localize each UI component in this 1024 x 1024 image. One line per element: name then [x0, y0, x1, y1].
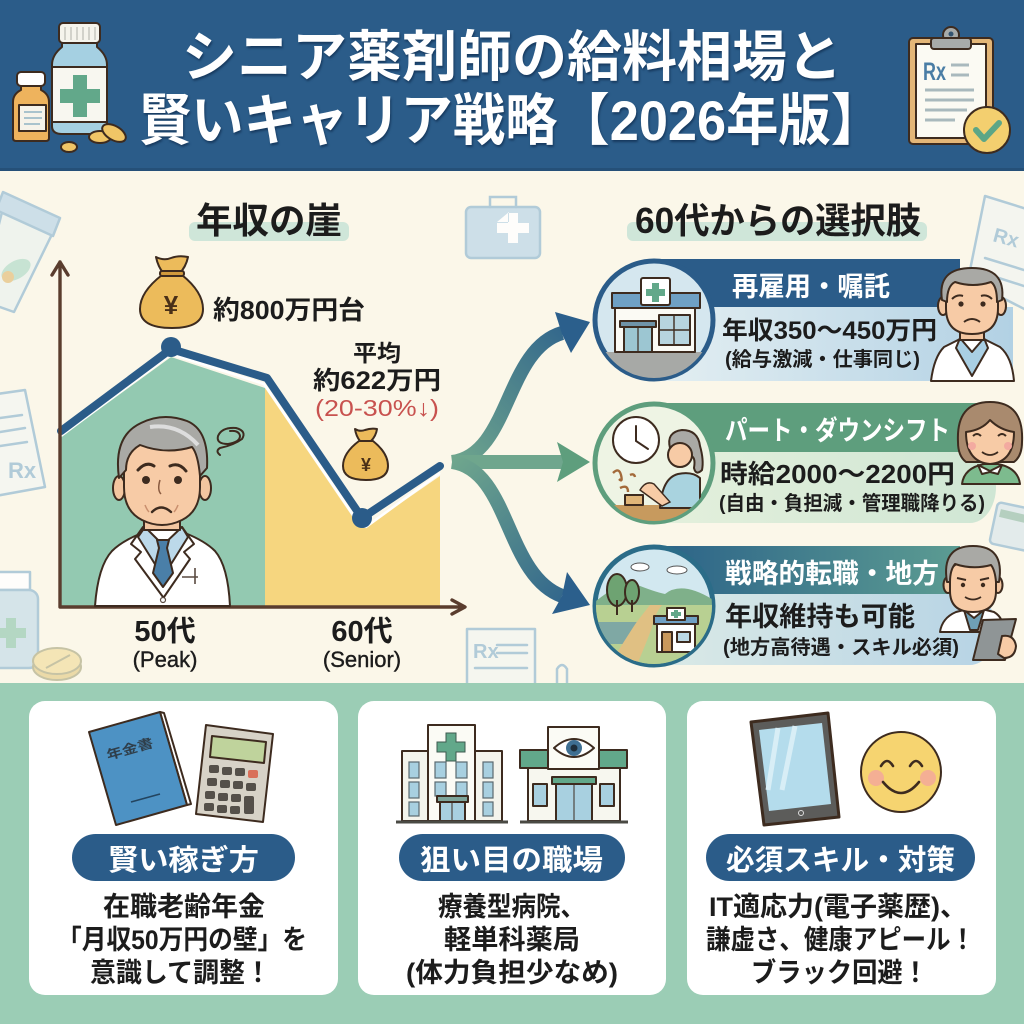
icon: calculator: [196, 725, 273, 822]
body text: 意識して調整！: [90, 958, 271, 988]
bottom mint band: [0, 683, 1024, 1024]
scene: rural pharmacy: [590, 547, 725, 668]
body text: [57, 892, 307, 988]
body text: IT適応力(電子薬歴)、: [709, 892, 967, 922]
pill heading: 狙い目の職場: [420, 844, 603, 877]
text: 再雇用・嘱託: [732, 272, 890, 302]
yellow area 60s: [265, 388, 440, 606]
body text: 在職老齢年金: [103, 892, 265, 922]
body text: (体力負担少なめ): [406, 958, 618, 988]
icon: eye clinic: [520, 727, 628, 822]
watermark medical icons: Rx: [8, 458, 37, 483]
body text: [706, 892, 975, 988]
title: 賢いキャリア戦略【2026年版】: [139, 89, 883, 152]
icon: smiley: [861, 732, 941, 812]
header band: [0, 0, 1024, 171]
icon: prescription clipboard with check: Rx: [923, 58, 946, 86]
scene: pharmacy building: [590, 261, 720, 382]
panel: 必須スキル・対策: [687, 701, 996, 995]
panel: 賢い稼ぎ方: [29, 701, 338, 995]
pill heading: 賢い稼ぎ方: [108, 844, 259, 877]
panel: 再雇用・嘱託: [590, 259, 1014, 382]
title: [139, 26, 883, 152]
label: 平均 約622万円: 平均: [353, 340, 401, 366]
icon: dizzy squiggle: [218, 428, 244, 455]
body text: [406, 892, 618, 988]
arrow: to part-time: [452, 442, 590, 482]
icon: tablet: [751, 713, 839, 825]
watermark medical icons: Rx: [473, 641, 499, 663]
panel: 戦略的転職・地方: 年収維持も可能: [725, 602, 915, 632]
body text: 軽単科薬局: [444, 925, 580, 955]
label: 約800万円台: 約800万円台: [213, 295, 365, 325]
icon: prescription clipboard with check: [909, 27, 1010, 153]
body text: 「月収50万円の壁」を: [57, 925, 307, 955]
icon: medicine bottles: [13, 23, 129, 152]
chart: income cliff: [52, 262, 465, 614]
scene: clock and relaxed worker: [590, 404, 720, 525]
label: 平均 約622万円: [313, 340, 441, 421]
icon: hospital: [396, 725, 508, 822]
watermark medical icons: Rx: [991, 225, 1021, 252]
cream background: [0, 170, 1024, 684]
axis label: 50代 (Peak): (Peak): [133, 647, 197, 672]
icon: small money bag: ¥: [361, 455, 371, 475]
panel: パート・ダウンシフト: 時給2000～2200円: [720, 459, 955, 489]
label: 平均 約622万円: 約622万円: [313, 367, 441, 395]
axis label: 50代 (Peak): 50代: [134, 616, 196, 648]
pill heading: [399, 834, 625, 881]
icon: small money bag: [343, 429, 388, 480]
icon: pension book: [89, 712, 191, 825]
body text: 謙虚さ、健康アピール！: [706, 925, 975, 955]
panel: 再雇用・嘱託: (給与激減・仕事同じ): [725, 347, 920, 371]
heading: 60代からの選択肢: 60代からの選択肢: [635, 200, 921, 241]
income line: [61, 337, 440, 528]
icon: large money bag: ¥: [164, 290, 179, 320]
body text: ブラック回避！: [751, 957, 928, 988]
pill heading: 必須スキル・対策: [726, 844, 955, 877]
body text: 療養型病院、: [438, 892, 585, 922]
icon: large money bag: [140, 256, 203, 328]
panel: 再雇用・嘱託: 年収350～450万円: [722, 317, 937, 345]
text: パート・ダウンシフト: [725, 415, 950, 446]
title: シニア薬剤師の給料相場と: [182, 26, 842, 88]
icon: smiling female pharmacist: [958, 402, 1022, 484]
heading: 年収の崖: 年収の崖: [196, 200, 342, 241]
pill heading: [72, 834, 295, 881]
panel: 狙い目の職場: [358, 701, 666, 995]
pill heading: [706, 834, 975, 881]
axis label: 60代 (Senior): 60代: [331, 616, 393, 648]
axis label: 50代 (Peak): [133, 616, 197, 672]
label: 平均 約622万円: (20-30%↓): [315, 395, 439, 421]
axis label: 60代 (Senior): [323, 616, 401, 672]
panel: パート・ダウンシフト: (自由・負担減・管理職降りる): [719, 491, 985, 515]
arrow: to strategic job change: [452, 462, 590, 614]
axes: [52, 262, 465, 614]
icon: pension book: 年金書: [105, 735, 155, 763]
arrow: to re-employment: [452, 312, 590, 462]
text: 戦略的転職・地方: [725, 559, 939, 589]
icon: pharmacist with tablet: [940, 546, 1016, 660]
panel: 戦略的転職・地方: (地方高待遇・スキル必須): [723, 636, 959, 659]
icon: worried senior pharmacist: [95, 417, 230, 606]
panel: 戦略的転職・地方: [590, 546, 1016, 668]
axis label: 60代 (Senior): (Senior): [323, 647, 401, 672]
icon: worried pharmacist: [931, 268, 1014, 381]
watermark medical icons: [0, 192, 1024, 689]
panel: パート・ダウンシフト: [590, 402, 1022, 525]
green area 50s: [61, 357, 265, 606]
